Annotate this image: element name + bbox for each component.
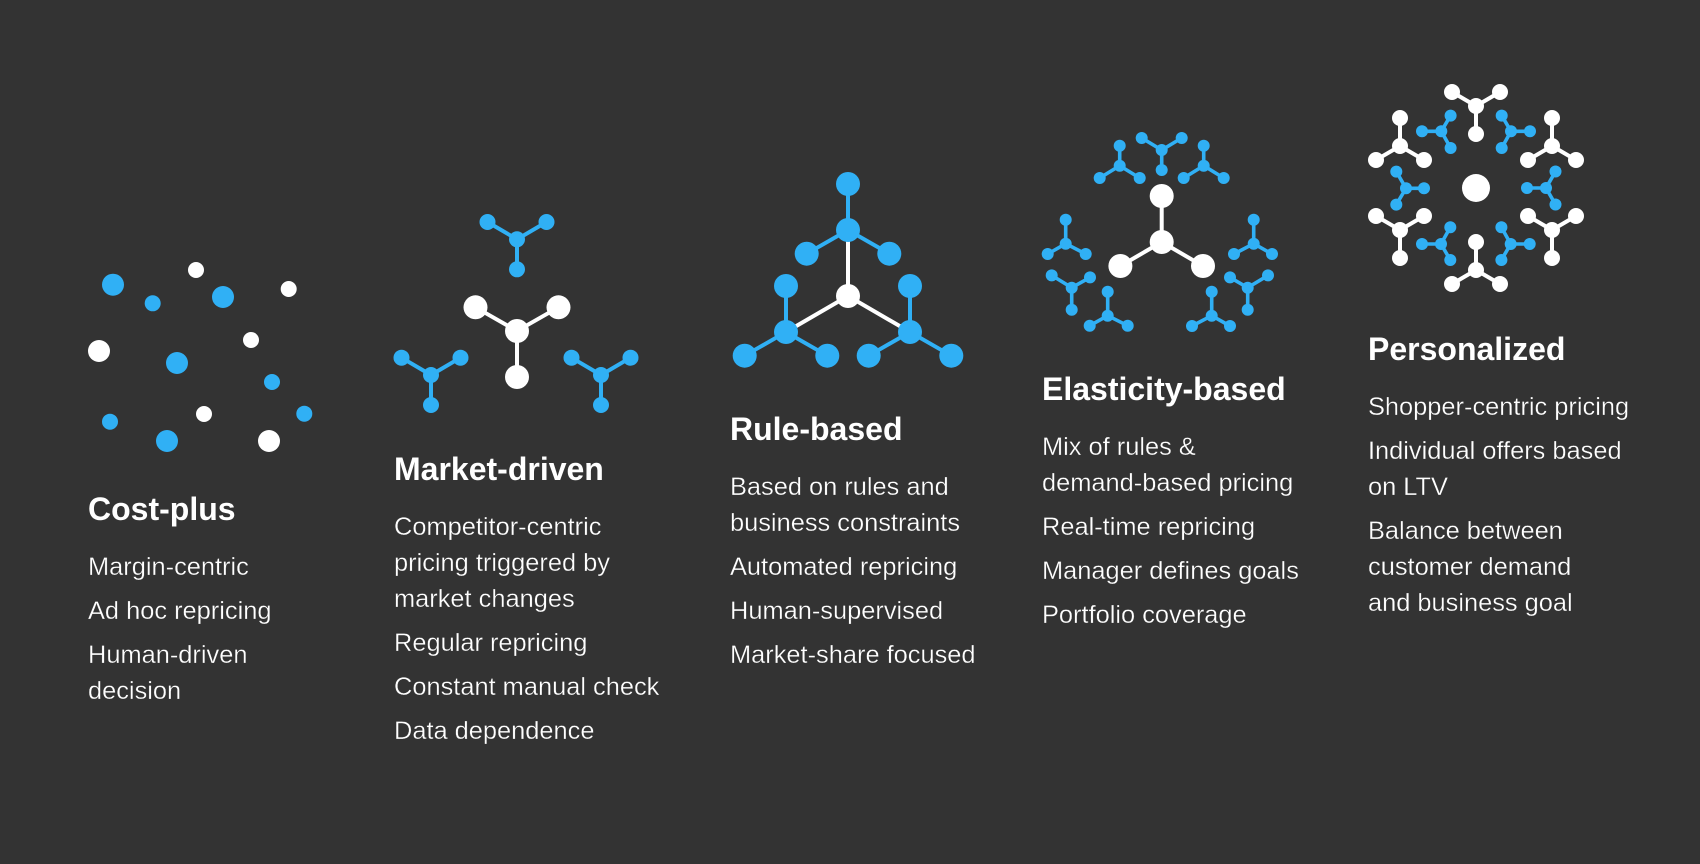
text block: Rule-based: Based on rules and	[730, 473, 949, 501]
text block: Market-driven: Data dependence	[394, 717, 594, 745]
text block: Personalized: Shopper-centric pricing	[1368, 393, 1629, 421]
text block: Cost-plus	[88, 491, 271, 705]
node: right blue cluster	[564, 350, 638, 413]
text block: Rule-based: Automated repricing	[730, 553, 957, 581]
icon: elasticity-based network	[1042, 132, 1278, 332]
node: central white cluster	[1108, 184, 1215, 278]
node: right blue cluster	[857, 274, 963, 368]
node: small blue clusters	[1042, 132, 1278, 332]
text block: Market-driven: market changes	[394, 585, 575, 613]
text block: Rule-based	[730, 411, 976, 669]
text block: Market-driven: Regular repricing	[394, 629, 587, 657]
node: central white hub	[786, 230, 910, 332]
text block: Personalized: Balance between	[1368, 517, 1563, 545]
icon: rule-based network	[733, 172, 963, 368]
text block: Cost-plus: Ad hoc repricing	[88, 597, 271, 625]
node: top blue cluster	[480, 214, 554, 277]
text block: Personalized: customer demand	[1368, 553, 1571, 581]
icon: market-driven network	[394, 214, 638, 413]
text block: Cost-plus: Margin-centric	[88, 553, 249, 581]
heading: Rule-based: Rule-based	[730, 411, 902, 447]
heading: Elasticity-based: Elasticity-based	[1042, 371, 1286, 407]
heading: Personalized: Personalized	[1368, 331, 1565, 367]
icon: personalized network	[1368, 84, 1584, 292]
text block: Elasticity-based: Real-time repricing	[1042, 513, 1255, 541]
text block: Elasticity-based	[1042, 371, 1299, 629]
text block: Elasticity-based: Manager defines goals	[1042, 557, 1299, 585]
text block: Rule-based: Human-supervised	[730, 597, 943, 625]
node: central white dot	[1462, 174, 1490, 202]
text block: Personalized: Individual offers based	[1368, 437, 1622, 465]
text block: Market-driven: pricing triggered by	[394, 549, 610, 577]
node: left blue cluster	[394, 350, 468, 413]
text block: Market-driven: Competitor-centric	[394, 513, 601, 541]
node: top blue cluster	[795, 172, 901, 266]
text block: Personalized: and business goal	[1368, 589, 1573, 617]
text block: Market-driven	[394, 451, 660, 745]
text block: Elasticity-based: Portfolio coverage	[1042, 601, 1247, 629]
text block: Market-driven: Constant manual check	[394, 673, 659, 701]
text block: Elasticity-based: Mix of rules &	[1042, 433, 1196, 461]
heading: Cost-plus: Cost-plus	[88, 491, 236, 527]
icon: cost-plus scattered dots	[88, 262, 312, 452]
node: left blue cluster	[733, 274, 839, 368]
text block: Cost-plus: Human-driven	[88, 641, 247, 669]
text block: Rule-based: Market-share focused	[730, 641, 976, 669]
node: blue clusters	[1390, 110, 1562, 266]
node: central white cluster	[464, 295, 570, 389]
text block: Personalized: on LTV	[1368, 473, 1448, 501]
text block: Cost-plus: decision	[88, 677, 181, 705]
text block: Rule-based: business constraints	[730, 509, 960, 537]
heading: Market-driven: Market-driven	[394, 451, 604, 487]
node: white clusters	[1368, 84, 1584, 292]
text block: Personalized	[1368, 331, 1629, 617]
text block: Elasticity-based: demand-based pricing	[1042, 469, 1293, 497]
